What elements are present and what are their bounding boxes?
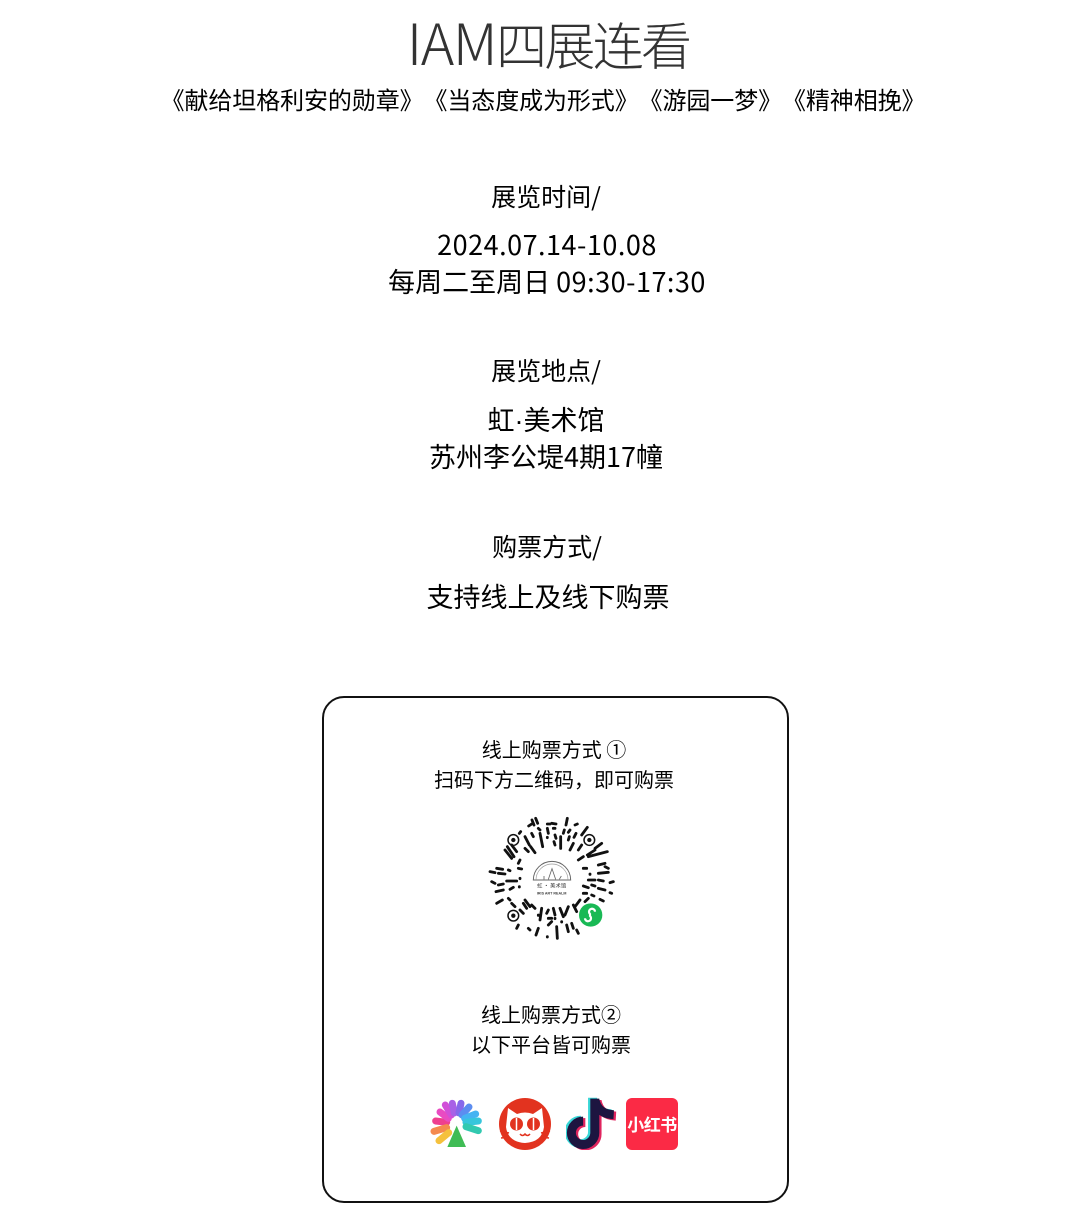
QR finder eyes	[508, 835, 595, 921]
QR centre logo: 虹 · 美术馆	[537, 881, 566, 889]
icon: mini program QR code	[488, 816, 615, 940]
title: IAM四展连看	[407, 0, 689, 82]
text: online method two	[471, 999, 631, 1058]
subtitle: exhibition names: 《献给坦格利安的勋章》《当态度成为形式》《游园一梦》《精神相挽》	[161, 81, 925, 116]
text: dates and hours: 2024.07.14-10.08	[437, 224, 657, 263]
text: ticket channels: 支持线上及线下购票	[426, 576, 670, 615]
heading: exhibition time: 展览时间/	[491, 178, 601, 214]
panel: online ticket purchase	[322, 696, 789, 1203]
text: online method one: 线上购票方式 ①	[482, 734, 626, 763]
icon: Xiaohongshu logo: 小红书	[627, 1111, 677, 1136]
QR mini program badge	[579, 903, 602, 927]
icon: Douyin note logo	[566, 1098, 616, 1150]
icon: Damai petal logo	[430, 1100, 482, 1147]
QR centre logo: IRIS ART REALM	[537, 891, 566, 895]
text: venue address: 苏州李公堤4期17幢	[429, 436, 663, 474]
QR centre logo	[533, 861, 571, 895]
text: venue address	[429, 399, 663, 474]
text: online method one	[434, 734, 674, 793]
heading: ticket purchase: 购票方式/	[492, 528, 602, 564]
text: dates and hours	[388, 224, 706, 300]
text: venue address: 虹·美术馆	[488, 399, 604, 438]
text: online method one: 扫码下方二维码，即可购票	[434, 764, 674, 793]
icon: Xiaohongshu logo	[626, 1098, 678, 1150]
text: online method two: 以下平台皆可购票	[471, 1029, 631, 1058]
icon: cat-face ticketing logo	[499, 1098, 551, 1150]
text: online method two: 线上购票方式②	[481, 999, 621, 1028]
text: dates and hours: 每周二至周日 09:30-17:30	[388, 260, 706, 300]
heading: exhibition venue: 展览地点/	[491, 352, 601, 388]
